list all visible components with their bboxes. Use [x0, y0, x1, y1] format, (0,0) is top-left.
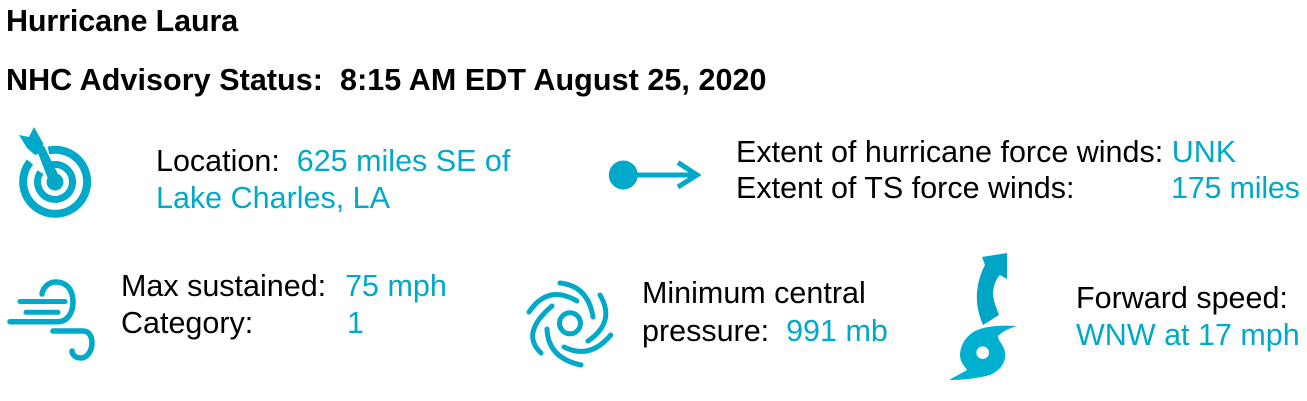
- forward speed value: WNW at 17 mph: [1076, 318, 1300, 352]
- location text line 2: Lake Charles, LA: [156, 181, 390, 215]
- advisory status: NHC Advisory Status: 8:15 AM EDT August 25, 2020: [6, 63, 767, 97]
- hurricane force winds extent: Extent of hurricane force winds: UNK: [736, 135, 1236, 169]
- forward speed label: Forward speed:: [1076, 281, 1288, 315]
- tropical storm force winds label: Extent of TS force winds:: [736, 171, 1074, 205]
- minimum central pressure label: Minimum central: [642, 276, 866, 310]
- icon: distance arrow: [609, 160, 697, 190]
- location text: Location: 625 miles SE of: [156, 144, 510, 178]
- category label: Category:: [121, 306, 253, 340]
- icon: target: [19, 127, 87, 214]
- icon: hurricane track: [949, 253, 1017, 380]
- icon: cyclone swirl: [529, 283, 611, 365]
- category value: 1: [347, 306, 364, 340]
- tropical storm force winds value: 175 miles: [1171, 171, 1300, 205]
- max sustained winds: Max sustained: 75 mph: [121, 269, 447, 303]
- icon: wind: [10, 282, 92, 358]
- pressure value: pressure: 991 mb: [642, 314, 888, 348]
- title: Hurricane Laura: [6, 4, 238, 38]
